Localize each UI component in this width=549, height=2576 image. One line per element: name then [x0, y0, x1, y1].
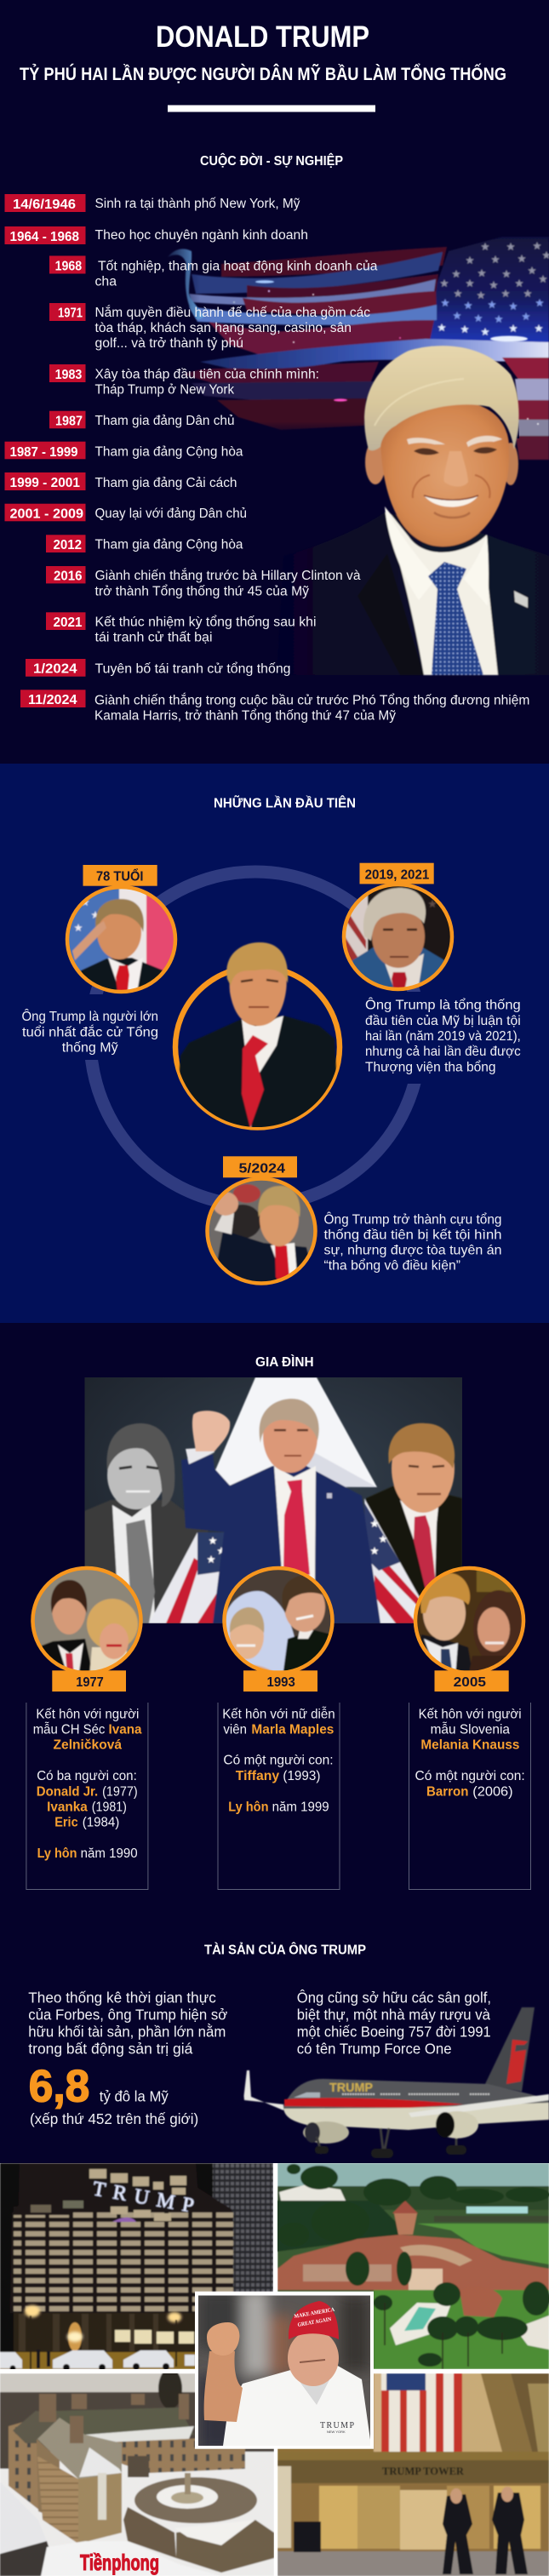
timeline row: 1983: 1983 — [55, 368, 82, 382]
timeline row: 14/6/1946: Sinh ra tại thành phố New York, Mỹ — [95, 197, 300, 211]
timeline row: 11/2024 — [20, 690, 529, 724]
title — [20, 20, 506, 84]
badge: 2005 — [434, 1670, 509, 1692]
card: second marriage: năm 1999 — [272, 1800, 329, 1814]
timeline row: 11/2024: Giành chiến thắng trong cuộc bầu cử trước Phó Tổng thống đương nhiệm — [94, 693, 529, 707]
timeline row: 1983: Tháp Trump ở New York — [95, 383, 234, 398]
text: oldest president — [22, 1008, 158, 1055]
image: Trump Force One plane: TRUMP — [329, 2081, 373, 2095]
photo: Mar-a-Lago — [277, 2163, 549, 2369]
hanging flag — [381, 2373, 462, 2460]
card: third marriage: Có một người con: — [415, 1769, 525, 1783]
timeline row: 2021: tái tranh cử thất bại — [95, 631, 213, 645]
timeline row: 1987: Tham gia đảng Dân chủ — [95, 414, 235, 428]
text: golf courses and plane: Ông cũng sở hữu các sân golf, — [297, 1989, 491, 2006]
card: first marriage: Có ba người con: — [37, 1769, 137, 1783]
text: convicted ex-president: Ông Trump trở thành cựu tổng — [323, 1211, 502, 1227]
timeline row: 1999 - 2001: Tham gia đảng Cải cách — [95, 476, 237, 490]
timeline row: 11/2024: Kamala Harris, trở thành Tổng thống thứ 47 của Mỹ — [94, 709, 396, 724]
heading: family: GIA ĐÌNH — [255, 1355, 314, 1370]
timeline row: 2012: Tham gia đảng Cộng hòa — [95, 538, 243, 552]
text: Forbes wealth: của Forbes, ông Trump hiện sở — [28, 2006, 227, 2024]
timeline row: 2016 — [46, 566, 361, 598]
timeline row: 2021: 2021 — [53, 615, 83, 630]
card: first marriage: (1977) — [102, 1784, 138, 1799]
timeline row: 1968 — [49, 255, 378, 289]
badge: 1977: 1977 — [76, 1675, 104, 1690]
heading: assets: TÀI SẢN CỦA ÔNG TRUMP — [204, 1942, 366, 1957]
timeline row: 2016: trở thành Tổng thống thứ 45 của Mỹ — [95, 584, 309, 598]
timeline row: 11/2024: 11/2024 — [28, 693, 77, 707]
card: second marriage: Ly hôn — [228, 1800, 269, 1814]
text: oldest president: tuổi nhất đắc cử Tổng — [22, 1023, 158, 1039]
timeline row: 1987 - 1999: 1987 - 1999 — [10, 445, 78, 460]
curled edge of flag — [168, 249, 204, 320]
oval photo: saluting, 78 years — [66, 885, 179, 998]
card: third marriage — [409, 1703, 531, 1890]
photo: Trump hotel at night — [0, 2163, 273, 2372]
timeline row: 2001 - 2009 — [5, 504, 247, 521]
timeline row: 1987 - 1999: Tham gia đảng Cộng hòa — [95, 445, 243, 460]
badge: 78 years — [83, 865, 157, 886]
card: third marriage: mẫu Slovenia — [431, 1720, 510, 1737]
card: second marriage: viên — [223, 1722, 247, 1737]
left flag — [149, 1532, 234, 1623]
timeline — [5, 194, 529, 724]
timeline row: 1987: 1987 — [55, 414, 83, 428]
card: first marriage: Ivanka — [47, 1800, 88, 1814]
badge: 2005: 2005 — [454, 1675, 486, 1690]
big number: 6,8 — [29, 2061, 89, 2111]
text: impeached twice: Ông Trump là tổng thống — [365, 997, 521, 1013]
card: first marriage: (1984) — [83, 1816, 119, 1830]
card: second marriage — [218, 1703, 340, 1890]
card: first marriage: Ivana — [109, 1722, 142, 1737]
text: Forbes wealth — [28, 1989, 227, 2127]
card: third marriage: Kết hôn với người — [419, 1707, 522, 1721]
polo logo: TRUMP — [320, 2421, 354, 2430]
oval photo: 1993 with Marla — [222, 1566, 334, 1677]
card: first marriage: Zelničková — [53, 1738, 122, 1753]
card: first marriage — [26, 1703, 148, 1890]
card: second marriage: Tiffany — [236, 1769, 279, 1783]
timeline row: 1/2024: Tuyên bố tái tranh cử tổng thống — [95, 661, 291, 676]
badge: 5/2024 — [223, 1156, 297, 1177]
background: life section — [0, 0, 549, 764]
timeline row: 1968: Tốt nghiệp, tham gia hoạt động kinh doanh của — [98, 259, 378, 274]
timeline row: 1964 - 1968: 1964 - 1968 — [10, 230, 79, 244]
text: impeached twice: Thượng viện tha bổng — [365, 1059, 495, 1074]
stripes — [221, 247, 447, 277]
timeline row: 2016: Giành chiến thắng trước bà Hillary Clinton và — [95, 569, 361, 583]
timeline row: 1964 - 1968 — [5, 226, 308, 244]
logo: Tien Phong: Tiềnphong — [80, 2550, 159, 2575]
background: firsts section — [0, 764, 549, 1323]
center oval photo: Trump in red tie — [175, 942, 340, 1132]
timeline row: 1/2024: 1/2024 — [33, 662, 77, 677]
text: convicted ex-president: “tha bổng vô điều kiện” — [323, 1258, 460, 1274]
text: convicted ex-president: sự, nhưng được tòa tuyên án — [323, 1244, 502, 1258]
right flag — [364, 1498, 421, 1623]
badge: 2019, 2021 — [359, 863, 434, 884]
text: impeached twice: hai lần (năm 2019 và 2021), — [365, 1029, 521, 1044]
decorative ring — [17, 872, 528, 1205]
timeline row: 2021: Kết thúc nhiệm kỳ tổng thống sau khi — [95, 615, 317, 630]
center photo: Trump in red cap: GREAT AGAIN — [297, 2316, 332, 2328]
oval photo: May 2024 — [206, 1177, 317, 1285]
heading: the firsts: NHỮNG LẦN ĐẦU TIÊN — [214, 795, 356, 810]
text: golf courses and plane: biệt thự, một nhà máy rượu và — [297, 2006, 490, 2024]
tower sign: TRUMP — [91, 2178, 196, 2218]
timeline row: 2001 - 2009: 2001 - 2009 — [10, 507, 83, 521]
text: golf courses and plane: có tên Trump Force One — [297, 2040, 452, 2057]
image: Trump portrait — [277, 346, 549, 675]
timeline row: 1983 — [49, 364, 319, 398]
timeline row: 1971: tòa tháp, khách sạn hạng sang, casino, sân — [95, 321, 352, 335]
text: golf courses and plane: một chiếc Boeing 757 đời 1991 — [297, 2023, 491, 2040]
image: Trump Force One plane — [243, 2007, 549, 2158]
timeline row: 14/6/1946: 14/6/1946 — [13, 197, 76, 212]
text: Forbes wealth: (xếp thứ 452 trên thế giới) — [30, 2110, 198, 2127]
card: third marriage: Melania Knauss — [420, 1738, 519, 1753]
card: first marriage: Kết hôn với người — [36, 1707, 139, 1721]
badge: 1977 — [52, 1670, 126, 1692]
card: first marriage: (1981) — [92, 1800, 127, 1814]
card: third marriage: (2006) — [472, 1784, 513, 1799]
timeline row: 2001 - 2009: Quay lại với đảng Dân chủ — [95, 507, 247, 521]
text: convicted ex-president: thống đầu tiên bị kết tội hình — [323, 1228, 502, 1242]
timeline row: 1987 - 1999 — [5, 442, 243, 460]
text: impeached twice: đầu tiên của Mỹ bị luận tội — [365, 1014, 521, 1028]
photo: Trump Tower — [277, 2373, 549, 2576]
timeline row: 1987 — [49, 411, 235, 428]
background: family and assets section — [0, 1323, 549, 2576]
text: impeached twice: nhưng cả hai lần đều được — [365, 1045, 521, 1059]
timeline row: 14/6/1946 — [5, 194, 300, 212]
card: first marriage: mẫu CH Séc — [33, 1720, 105, 1737]
timeline row: 1971: Nắm quyền điều hành đế chế của cha gồm các — [95, 306, 370, 320]
left man, black and white — [84, 1423, 209, 1623]
center man — [181, 1399, 380, 1623]
heading: life and career: CUỘC ĐỜI - SỰ NGHIỆP — [200, 153, 343, 169]
image: American flag — [162, 234, 549, 464]
image: three Trump portraits with flags — [84, 1377, 462, 1623]
timeline row: 2012: 2012 — [53, 538, 82, 552]
photo collage — [0, 2163, 549, 2576]
oval photo: impeachment — [342, 883, 454, 996]
oval photo: 2005 with Melania — [414, 1566, 525, 1677]
guards and sandwich board — [294, 2493, 528, 2574]
timeline row: 2016: 2016 — [54, 570, 83, 584]
badge: 5/2024: 5/2024 — [238, 1162, 285, 1176]
text: oldest president: thống Mỹ — [62, 1040, 118, 1055]
timeline row: 1999 - 2001 — [5, 472, 237, 490]
badge: 2019, 2021: 2019, 2021 — [365, 868, 429, 883]
timeline row: 2012 — [46, 535, 243, 552]
text: golf courses and plane — [297, 1989, 491, 2057]
timeline row: 2021 — [46, 612, 317, 645]
center photo: Trump in red cap — [195, 2290, 374, 2452]
right man — [365, 1422, 462, 1597]
card: first marriage: Ly hôn — [37, 1846, 77, 1861]
badge: 1993: 1993 — [267, 1675, 295, 1690]
text: Forbes wealth: hữu khối tài sản, phần lớn nằm — [28, 2022, 226, 2040]
text: impeached twice — [365, 997, 521, 1074]
card: second marriage: Có một người con: — [223, 1754, 334, 1768]
text: Forbes wealth: trong bất động sản trị giá — [28, 2040, 193, 2057]
card: second marriage: Kết hôn với nữ diễn — [222, 1705, 335, 1721]
card: first marriage: Eric — [54, 1816, 78, 1830]
timeline row: 1971 — [49, 303, 370, 351]
center photo: Trump in red cap: NEW YORK — [327, 2430, 346, 2434]
timeline row: 1964 - 1968: Theo học chuyên ngành kinh doanh — [95, 228, 308, 243]
timeline row: 1971: 1971 — [58, 306, 83, 321]
title underline bar — [168, 106, 375, 112]
text: convicted ex-president — [323, 1211, 502, 1274]
card: first marriage: năm 1990 — [81, 1846, 138, 1861]
text: Forbes wealth: tỷ đô la Mỹ — [100, 2087, 169, 2104]
card: second marriage: Marla Maples — [251, 1722, 334, 1737]
timeline row: 1968: 1968 — [55, 260, 82, 274]
timeline row: 1983: Xây tòa tháp đầu tiên của chính mình: — [95, 368, 319, 382]
card: second marriage: (1993) — [283, 1769, 320, 1783]
cap slogan: MAKE AMERICA — [294, 2307, 335, 2320]
badge: 78 years: 78 TUỔI — [96, 867, 143, 884]
card: first marriage: Donald Jr. — [37, 1784, 98, 1799]
timeline row: 1971: golf... và trở thành tỷ phú — [95, 336, 243, 351]
badge: 1993 — [243, 1670, 317, 1692]
text: Forbes wealth: Theo thống kê thời gian thực — [28, 1989, 216, 2006]
card: third marriage: Barron — [426, 1784, 468, 1799]
timeline row: 1999 - 2001: 1999 - 2001 — [10, 476, 80, 490]
oval photo: 1977 with Ivana — [31, 1566, 143, 1677]
text: oldest president: Ông Trump là người lớn — [22, 1008, 158, 1024]
tower sign text: TRUMP TOWER — [382, 2464, 465, 2477]
photo: snowy estate — [0, 2368, 274, 2576]
timeline row: 1968: cha — [95, 275, 117, 289]
title: DONALD TRUMP — [156, 20, 369, 54]
timeline row: 1/2024 — [26, 659, 291, 677]
